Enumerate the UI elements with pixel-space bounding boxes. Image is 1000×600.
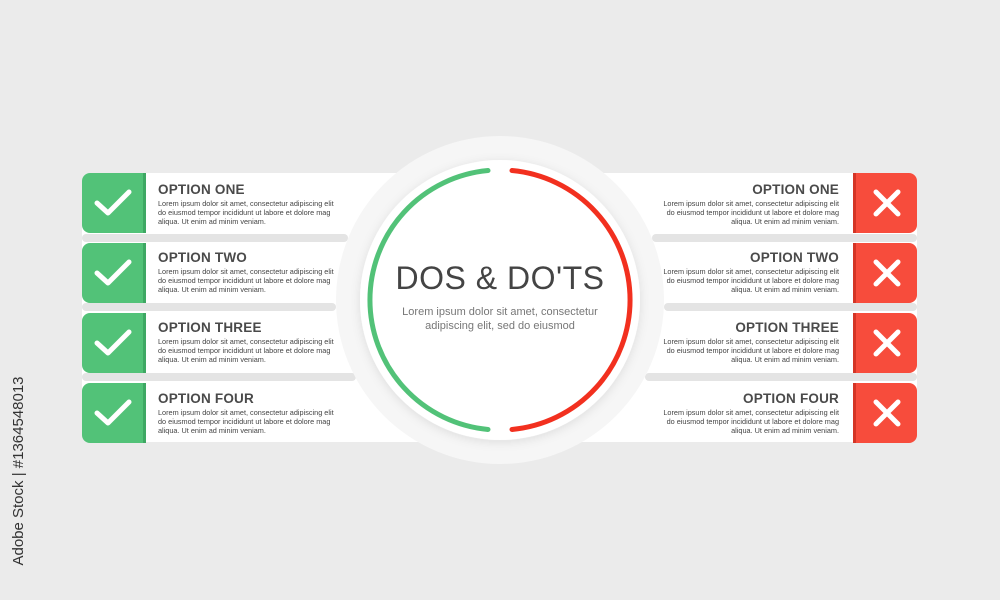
text: do option one — [158, 182, 334, 226]
text: do option one: aliqua. Ut enim ad minim veniam. — [158, 217, 266, 226]
text: do option four: OPTION FOUR — [158, 391, 254, 406]
text: dont option one: OPTION ONE — [752, 182, 839, 197]
text: do option two: Lorem ipsum dolor sit amet, consectetur adipiscing elit — [158, 267, 334, 276]
icon: check 3 — [82, 313, 146, 373]
text: do option four: aliqua. Ut enim ad minim veniam. — [158, 426, 266, 435]
text: dont option two — [663, 250, 839, 294]
text: dont option three: do eiusmod tempor incididunt ut labore et dolore mag — [667, 346, 839, 355]
icon: cross 1 — [853, 173, 917, 233]
text: do option one: do eiusmod tempor incididunt ut labore et dolore mag — [158, 208, 330, 217]
title: DOS & DO'TS — [396, 260, 604, 296]
center circle — [336, 136, 664, 464]
text: do option three: aliqua. Ut enim ad minim veniam. — [158, 355, 266, 364]
text: dont option four: Lorem ipsum dolor sit amet, consectetur adipiscing elit — [663, 408, 839, 417]
text: dont option four — [663, 391, 839, 435]
icon: check 4 — [82, 383, 146, 443]
text: dont option three: OPTION THREE — [735, 320, 839, 335]
watermark id: Adobe Stock | #1364548013 — [10, 376, 27, 566]
text: do option four — [158, 391, 334, 435]
subtitle: Lorem ipsum dolor sit amet, consectetur adipiscing elit, sed do eiusmod — [402, 306, 598, 332]
text: dont option one: aliqua. Ut enim ad minim veniam. — [731, 217, 839, 226]
text: do option two — [158, 250, 334, 294]
text: dont option one — [663, 182, 839, 226]
text: dont option two: aliqua. Ut enim ad minim veniam. — [731, 285, 839, 294]
text: do option two: OPTION TWO — [158, 250, 247, 265]
text: dont option two: Lorem ipsum dolor sit amet, consectetur adipiscing elit — [663, 267, 839, 276]
arc: red — [512, 171, 630, 429]
arc: green — [370, 171, 488, 429]
icon: cross 4 — [853, 383, 917, 443]
text: do option one: Lorem ipsum dolor sit amet, consectetur adipiscing elit — [158, 199, 334, 208]
text: dont option four: OPTION FOUR — [743, 391, 839, 406]
text: do option four: do eiusmod tempor incididunt ut labore et dolore mag — [158, 417, 330, 426]
text: dont option three: Lorem ipsum dolor sit amet, consectetur adipiscing elit — [663, 337, 839, 346]
text: do option three: do eiusmod tempor incididunt ut labore et dolore mag — [158, 346, 330, 355]
text: dont option one: do eiusmod tempor incididunt ut labore et dolore mag — [667, 208, 839, 217]
text: dont option two: OPTION TWO — [750, 250, 839, 265]
text: dont option three — [663, 320, 839, 364]
text: do option four: Lorem ipsum dolor sit amet, consectetur adipiscing elit — [158, 408, 334, 417]
icon: check 1 — [82, 173, 146, 233]
text: do option two: do eiusmod tempor incididunt ut labore et dolore mag — [158, 276, 330, 285]
text: do option two: aliqua. Ut enim ad minim veniam. — [158, 285, 266, 294]
text: do option three — [158, 320, 334, 364]
icon: cross 3 — [853, 313, 917, 373]
text: do option three: OPTION THREE — [158, 320, 262, 335]
text: do option three: Lorem ipsum dolor sit amet, consectetur adipiscing elit — [158, 337, 334, 346]
text: dont option four: do eiusmod tempor incididunt ut labore et dolore mag — [667, 417, 839, 426]
white panel — [82, 173, 917, 442]
icon: check 2 — [82, 243, 146, 303]
icon: cross 2 — [853, 243, 917, 303]
text: do option one: OPTION ONE — [158, 182, 245, 197]
text: dont option three: aliqua. Ut enim ad minim veniam. — [731, 355, 839, 364]
text: dont option two: do eiusmod tempor incididunt ut labore et dolore mag — [667, 276, 839, 285]
text: dont option four: aliqua. Ut enim ad minim veniam. — [731, 426, 839, 435]
text: dont option one: Lorem ipsum dolor sit amet, consectetur adipiscing elit — [663, 199, 839, 208]
